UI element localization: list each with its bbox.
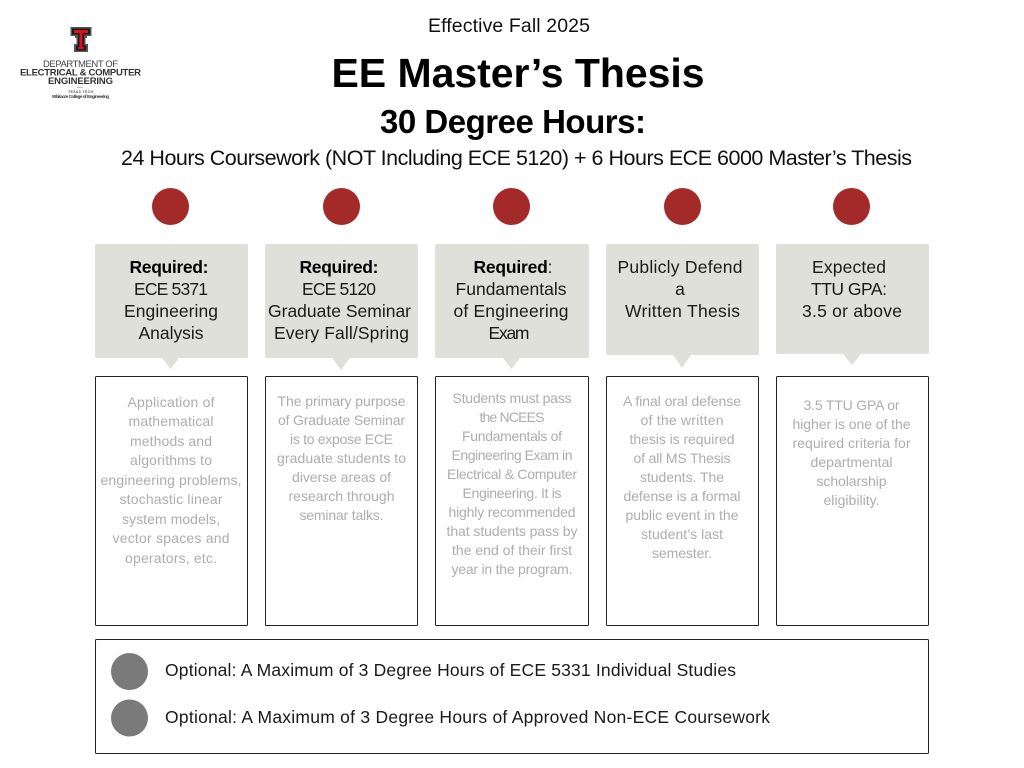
- description box: stochastic linear: [120, 491, 223, 507]
- description box: [606, 376, 758, 626]
- header box: ECE 5120: [302, 279, 376, 299]
- description box: [776, 376, 928, 626]
- description box: scholarship: [816, 473, 887, 489]
- icon: grey circle: [111, 700, 148, 736]
- description box: 3.5 TTU GPA or: [804, 397, 900, 413]
- description box: [96, 376, 248, 626]
- header box: [95, 244, 248, 369]
- icon: double T: [70, 27, 92, 52]
- description box: methods and: [130, 433, 212, 449]
- column 1: engineering analysis: [95, 188, 248, 626]
- description box: semester.: [652, 545, 712, 561]
- description box: system models,: [122, 511, 220, 527]
- description box: operators, etc.: [125, 550, 217, 566]
- header box: a: [675, 279, 685, 299]
- logo: department: Whitacre College of Engineering: [52, 94, 109, 99]
- icon: grey circle: [111, 653, 148, 690]
- description box: thesis is required: [630, 431, 734, 447]
- description box: higher is one of the: [792, 416, 911, 432]
- header box: [606, 244, 759, 368]
- description box: Electrical & Computer: [447, 466, 577, 482]
- text: hours breakdown: 24 Hours Coursework (NOT Including ECE 5120) + 6 Hours ECE 6000 Master’s Thesis: [121, 146, 912, 170]
- header box: Required:: [130, 257, 208, 277]
- header box: Fundamentals: [456, 279, 567, 299]
- optional item: non-ECE coursework: Optional: A Maximum of 3 Degree Hours of Approved Non-ECE Coursework: [165, 707, 770, 727]
- icon: red circle: [323, 188, 360, 225]
- column 4: public defense: [606, 188, 759, 626]
- description box: public event in the: [626, 507, 739, 523]
- header box: Expected: [812, 257, 886, 277]
- column 3: fundamentals of engineering exam: [435, 188, 589, 626]
- description box: engineering problems,: [100, 472, 242, 488]
- column 2: graduate seminar: [265, 188, 418, 626]
- header box: Engineering: [124, 301, 218, 321]
- description box: The primary purpose: [278, 393, 406, 409]
- description box: Engineering Exam in: [452, 447, 572, 463]
- description box: Application of: [128, 394, 215, 410]
- description box: the NCEES: [480, 409, 544, 425]
- header box: Required:: [474, 257, 552, 277]
- description box: required criteria for: [792, 435, 911, 451]
- header box: TTU GPA:: [811, 279, 887, 299]
- description box: students. The: [640, 469, 724, 485]
- description box: highly recommended: [448, 504, 576, 520]
- description box: defense is a formal: [624, 488, 740, 504]
- optional item: individual studies: Optional: A Maximum of 3 Degree Hours of ECE 5331 Individual Studies: [165, 660, 736, 680]
- panel: optional items: [96, 640, 928, 754]
- header box: Graduate Seminar: [268, 301, 411, 321]
- logo: department: TEXAS TECH: [68, 90, 93, 94]
- description box: Engineering. It is: [462, 485, 562, 501]
- header box: [265, 244, 418, 370]
- description box: Fundamentals of: [462, 428, 562, 444]
- description box: of Graduate Seminar: [278, 412, 405, 428]
- logo: department: ELECTRICAL & COMPUTER: [20, 68, 141, 78]
- icon: red circle: [664, 188, 701, 225]
- heading: degree hours: 30 Degree Hours:: [380, 103, 646, 140]
- description box: of the written: [640, 412, 724, 428]
- header box: Written Thesis: [625, 301, 740, 321]
- description box: vector spaces and: [112, 530, 230, 546]
- header box: Analysis: [138, 323, 204, 343]
- description box: year in the program.: [452, 561, 572, 577]
- description box: algorithms to: [130, 452, 212, 468]
- description box: of all MS Thesis: [634, 450, 730, 466]
- header box: 3.5 or above: [802, 301, 902, 321]
- description box: graduate students to: [277, 450, 406, 466]
- icon: red circle: [152, 188, 189, 225]
- subtitle: effective date: Effective Fall 2025: [428, 15, 590, 37]
- header box: [435, 244, 589, 369]
- description box: [436, 376, 588, 626]
- column 5: expected GPA: [776, 188, 929, 626]
- description box: that students pass by: [446, 523, 578, 539]
- description box: is to expose ECE: [290, 431, 393, 447]
- description box: [266, 376, 418, 626]
- description box: the end of their first: [452, 542, 572, 558]
- description box: diverse areas of: [292, 469, 391, 485]
- header box: of Engineering: [454, 301, 568, 321]
- description box: departmental: [810, 454, 892, 470]
- icon: red circle: [833, 188, 870, 225]
- header box: [776, 244, 929, 365]
- icon: red circle: [493, 188, 530, 225]
- description box: research through: [288, 488, 394, 504]
- title: EE Master’s Thesis: [332, 50, 704, 96]
- header box: Required:: [300, 257, 378, 277]
- description box: Students must pass: [452, 390, 572, 406]
- logo: department: ENGINEERING: [48, 76, 113, 87]
- header box: Exam: [488, 323, 530, 343]
- header box: Every Fall/Spring: [274, 323, 409, 343]
- description box: seminar talks.: [300, 507, 384, 523]
- logo: department: [20, 27, 141, 99]
- logo: department: DEPARTMENT OF: [43, 59, 118, 70]
- header box: Publicly Defend: [618, 257, 742, 277]
- header box: ECE 5371: [134, 279, 208, 299]
- description box: student’s last: [641, 526, 723, 542]
- description box: A final oral defense: [623, 393, 741, 409]
- description box: eligibility.: [824, 492, 880, 508]
- description box: mathematical: [128, 413, 214, 429]
